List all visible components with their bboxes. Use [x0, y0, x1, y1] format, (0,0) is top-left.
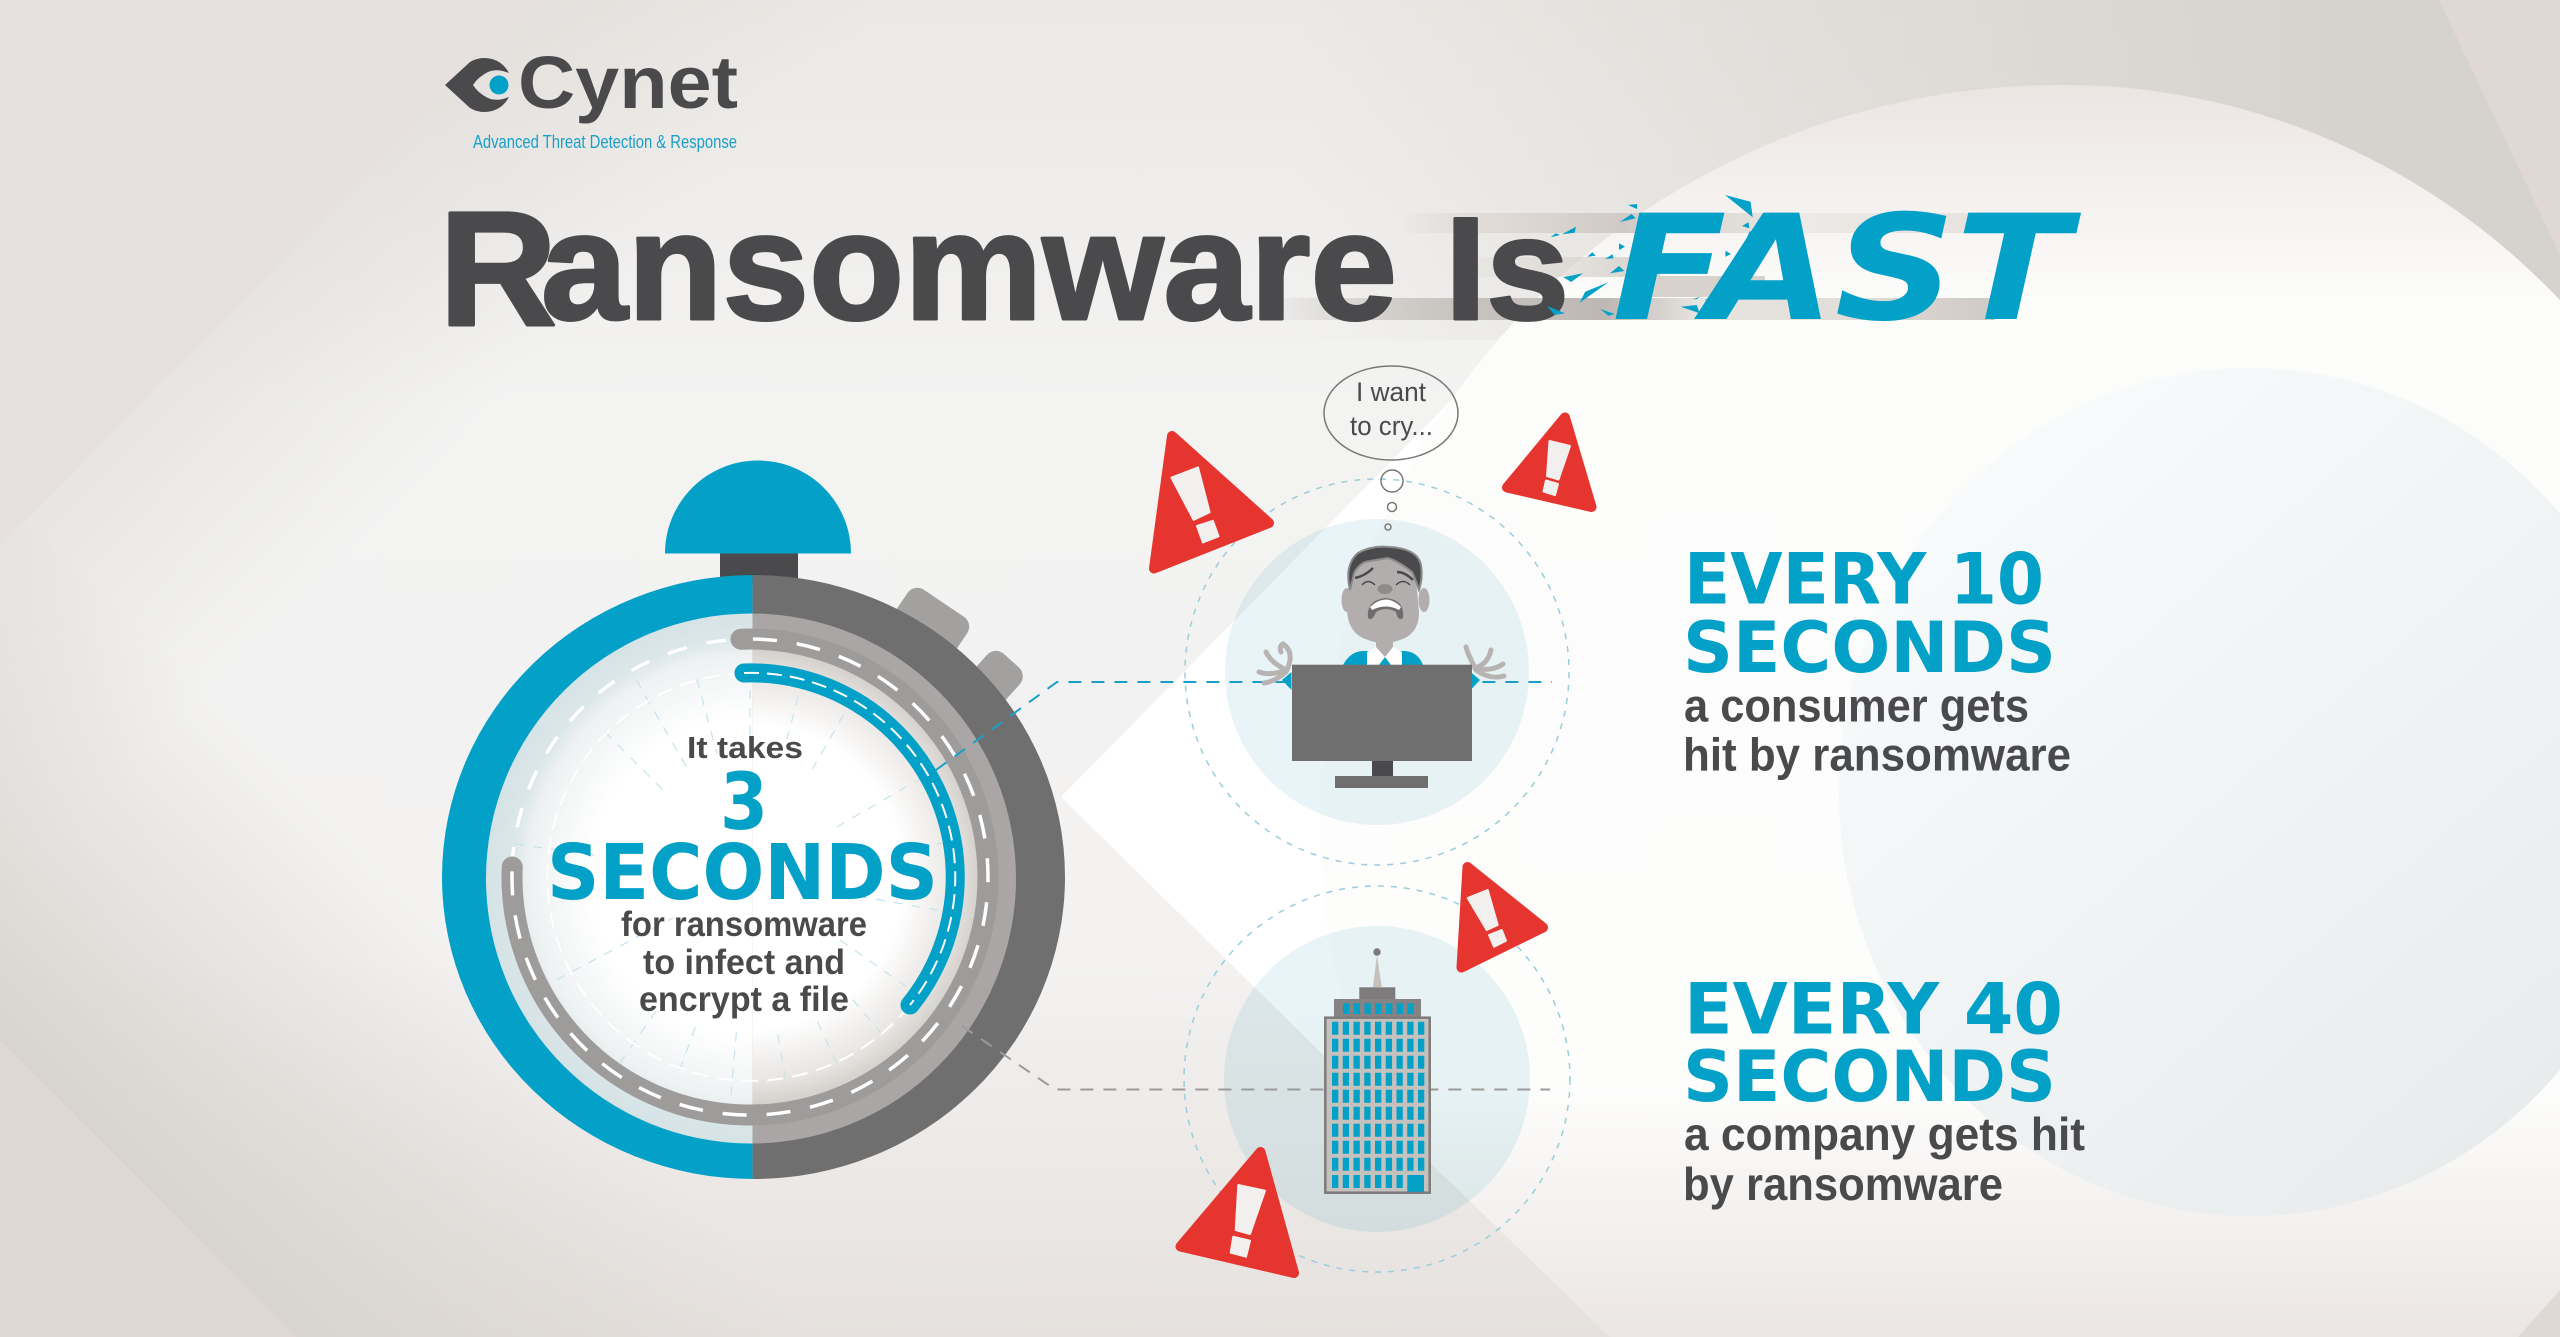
text block: every 40 seconds: SECONDS	[1683, 1036, 2056, 1118]
stopwatch text: SECONDS	[547, 829, 938, 918]
text block: every 10 seconds: a consumer gets	[1684, 680, 2029, 732]
thought bubble: I want	[1356, 377, 1426, 407]
title: FAST: FAST	[1612, 184, 2082, 354]
text block: every 40 seconds: by ransomware	[1683, 1158, 2003, 1210]
stopwatch text	[547, 730, 938, 1019]
office building	[1325, 948, 1430, 1193]
faint seconds ring	[547, 673, 910, 1081]
logo	[445, 41, 738, 152]
text block: every 10 seconds: EVERY 10	[1684, 538, 2044, 620]
consumer circles	[1185, 479, 1569, 865]
text block: every 10 seconds: SECONDS	[1683, 607, 2056, 689]
stopwatch text: It takes	[687, 730, 803, 765]
icon: warning triangle upper right	[1507, 418, 1592, 507]
icon: warning triangle upper right	[1462, 867, 1543, 968]
blue 3 second arc	[744, 673, 955, 1005]
stopwatch side buttons	[886, 583, 1028, 714]
connector: stopwatch to consumer	[936, 682, 1552, 770]
icon: eye mark	[445, 58, 509, 112]
logo wordmark: Cynet	[518, 41, 738, 124]
radial tick marks	[515, 672, 974, 1113]
connector: stopwatch to company	[962, 1026, 1550, 1090]
icon: warning triangle upper left	[1154, 436, 1269, 568]
stopwatch text: to infect and	[643, 943, 845, 982]
thought bubble: to cry...	[1350, 411, 1433, 441]
text block: every 10 seconds: hit by ransomware	[1683, 728, 2071, 780]
panel: company	[962, 867, 1570, 1273]
icon: warning triangle lower left	[1180, 1152, 1294, 1273]
title speed streaks	[1260, 213, 2075, 320]
title: Ransomware Is: Is	[1445, 187, 1569, 350]
panel: consumer	[936, 366, 1592, 865]
company circles	[1184, 886, 1570, 1272]
title: Ransomware Is: ansomware	[541, 181, 1397, 352]
title: Ransomware Is: R	[439, 177, 557, 360]
stopwatch body	[442, 575, 1065, 1179]
stopwatch text: encrypt a file	[639, 980, 849, 1019]
text block: every 40 seconds: EVERY 40	[1684, 968, 2063, 1050]
title: Ransomware Is	[439, 177, 1569, 360]
text block: every 40 seconds	[1683, 968, 2085, 1210]
stopwatch	[442, 460, 1065, 1179]
crying person	[1259, 547, 1504, 690]
stopwatch text: for ransomware	[621, 905, 867, 944]
text block: every 10 seconds	[1683, 538, 2071, 780]
text block: every 40 seconds: a company gets hit	[1684, 1108, 2085, 1160]
shattered fragments	[1547, 195, 1763, 316]
computer monitor	[1292, 665, 1472, 788]
road track (elapsed ring)	[512, 639, 988, 1115]
logo tagline: Advanced Threat Detection & Response	[473, 132, 737, 152]
stopwatch text: 3	[720, 758, 768, 848]
thought bubble	[1324, 366, 1458, 530]
title	[439, 177, 2082, 360]
stopwatch crown	[665, 460, 851, 584]
